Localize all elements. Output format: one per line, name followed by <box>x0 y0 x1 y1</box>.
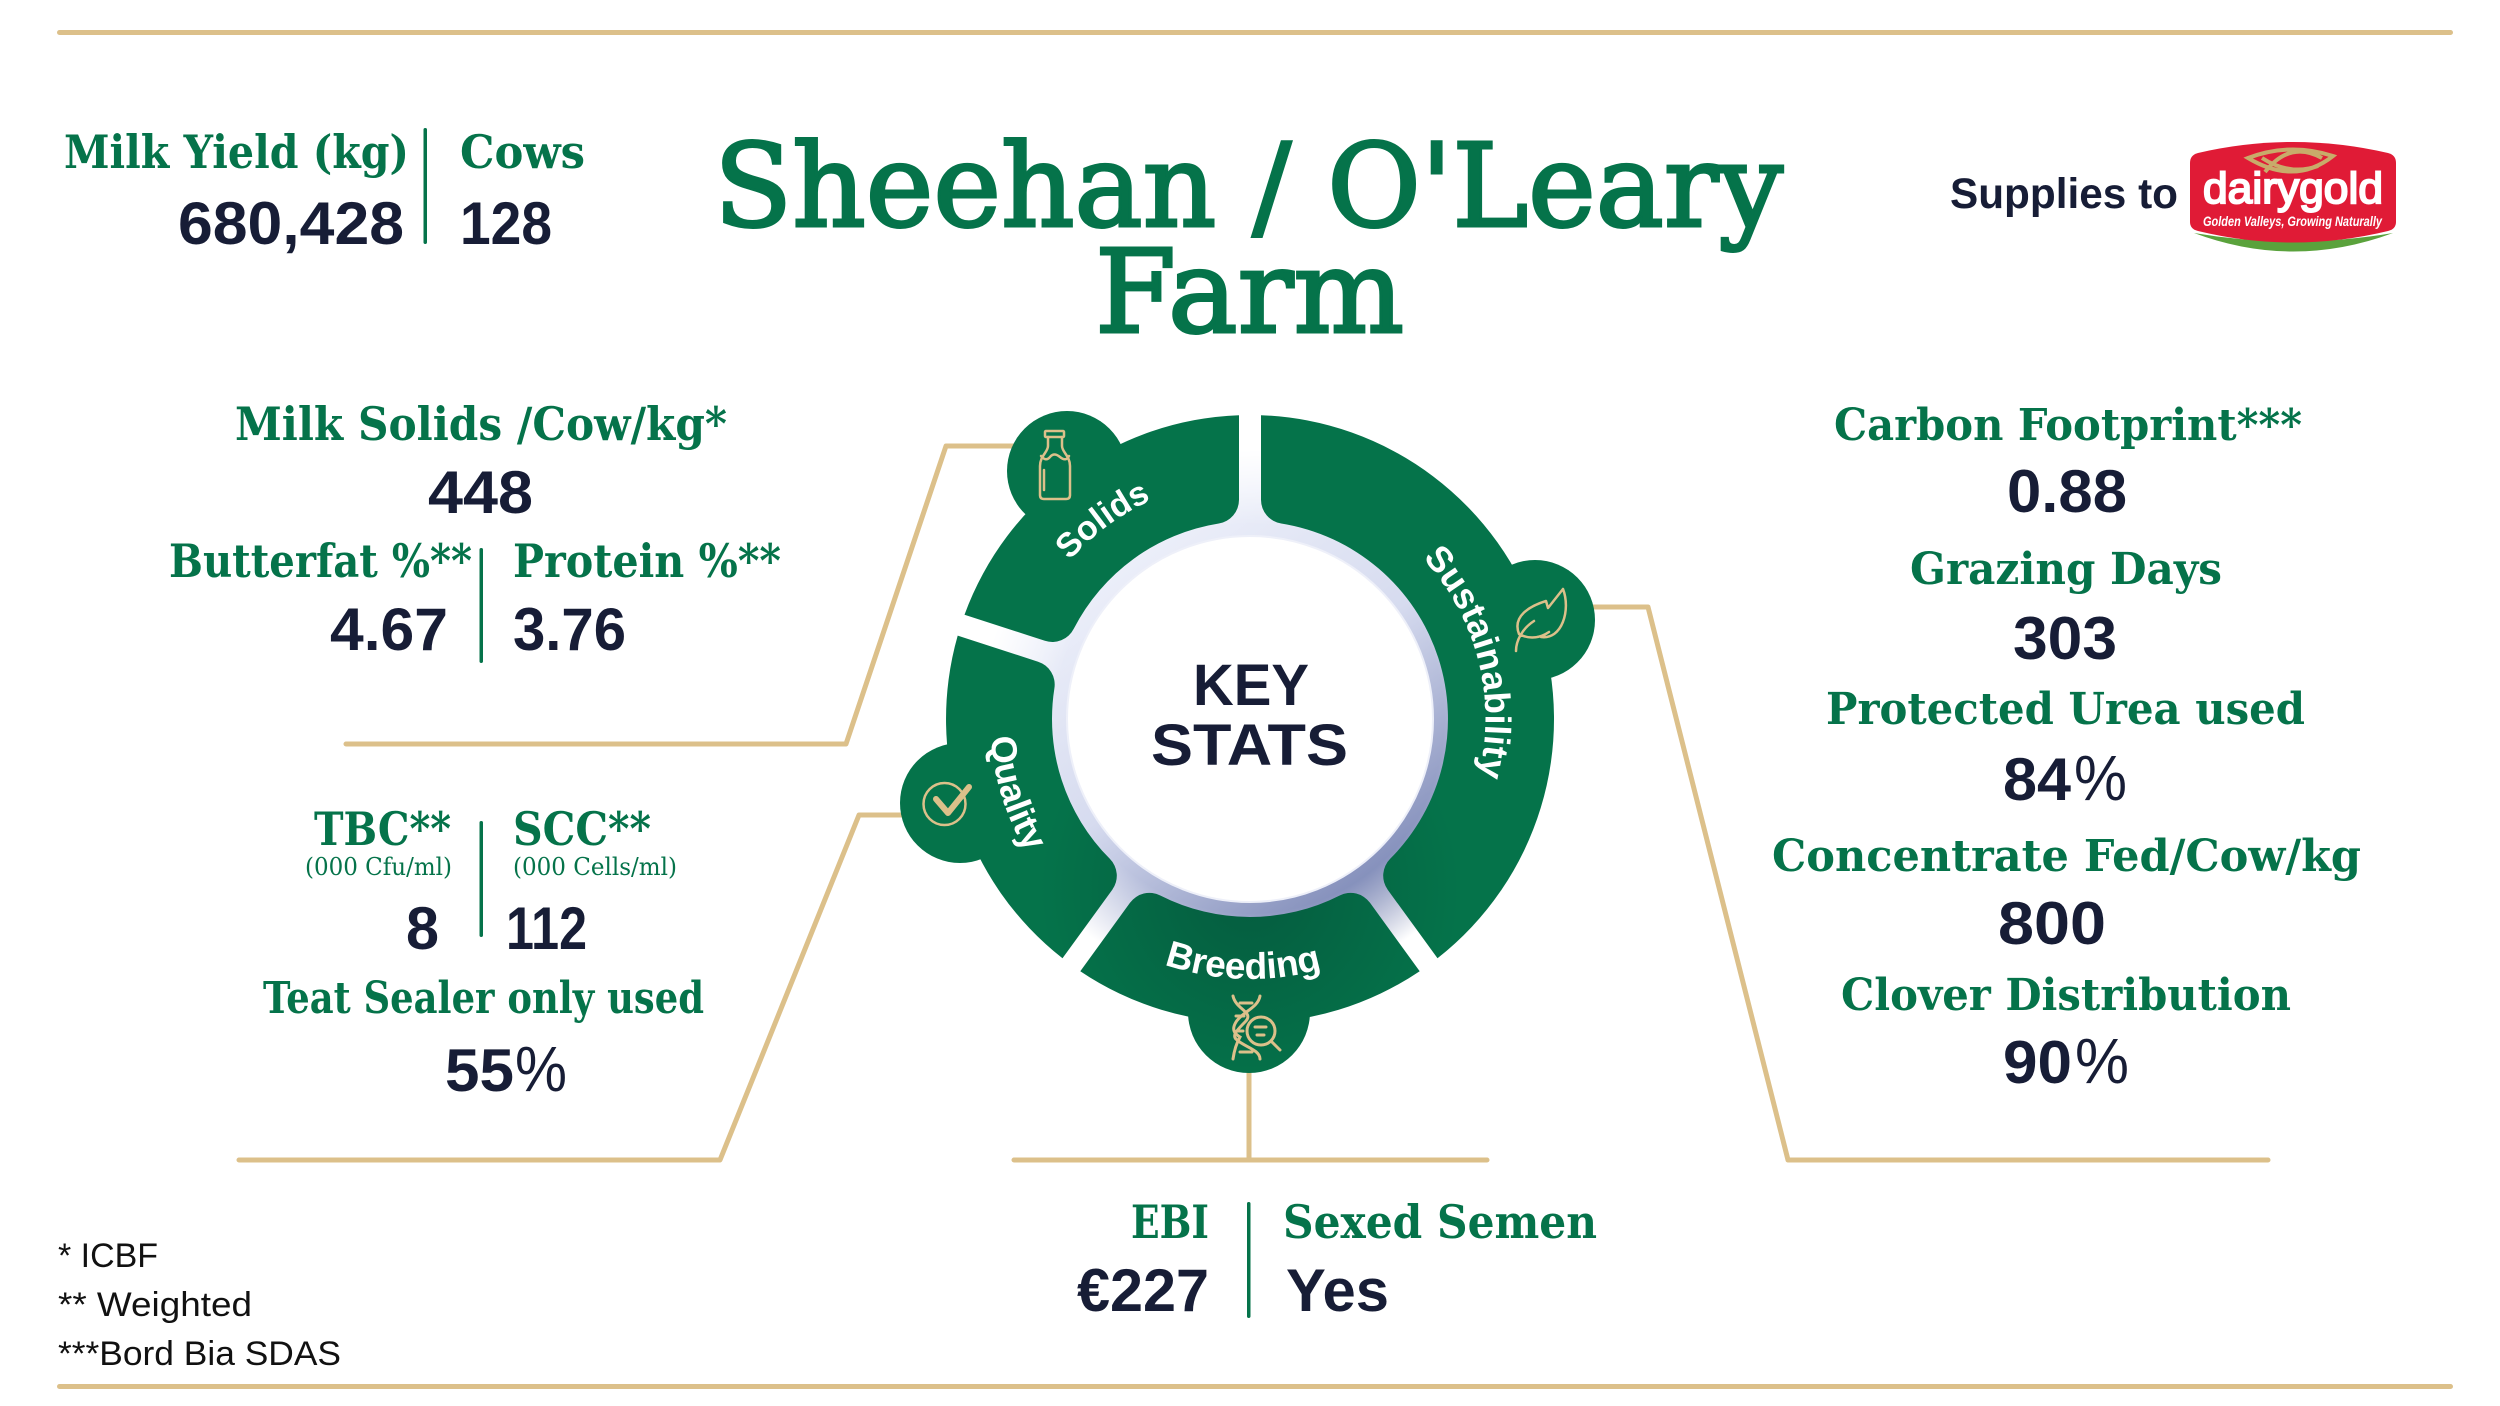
panel: solids stats: Protein %** <box>513 534 781 588</box>
supplies to label: Supplies to <box>1950 170 2178 218</box>
panel: quality stats: 55 <box>445 1037 514 1104</box>
segment: solids <box>964 411 1239 642</box>
center label: key stats <box>1151 653 1348 778</box>
panel: quality stats: (000 Cells/ml) <box>513 853 677 881</box>
icon: leaf <box>1516 589 1566 651</box>
panel: sustainability stats: Clover Distribution <box>1841 970 2291 1021</box>
shaded disc behind ring <box>1020 480 1448 940</box>
segment: sustainability: Sustainability <box>1426 546 1512 780</box>
panel: quality stats: SCC** <box>513 802 651 856</box>
icon: dna with magnifier <box>1233 996 1280 1059</box>
stat: milk yield and cows: 680,428 <box>178 190 404 257</box>
panel: sustainability stats: Concentrate Fed/Cow/kg <box>1772 831 2361 882</box>
panel: solids stats: Milk Solids /Cow/kg* <box>235 397 727 451</box>
center label: key stats: KEY <box>1193 653 1309 718</box>
bottom rule <box>57 1384 2453 1389</box>
logo: dairygold: Golden Valleys, Growing Naturally <box>2203 213 2383 229</box>
panel: quality stats: % <box>515 1033 567 1105</box>
connector: quality <box>239 815 910 1160</box>
icon: milk bottle <box>1040 431 1070 499</box>
panel: sustainability stats: % <box>2074 742 2127 814</box>
panel: sustainability stats: 303 <box>2013 605 2117 672</box>
stat: milk yield and cows: Cows <box>460 125 585 179</box>
panel: breeding stats <box>1077 1195 1597 1324</box>
panel: solids stats <box>169 397 781 663</box>
icon: check mark <box>924 783 969 825</box>
panel: sustainability stats: 0.88 <box>2007 458 2127 525</box>
center circle <box>1067 536 1433 902</box>
title <box>714 120 1783 360</box>
panel: solids stats: 3.76 <box>513 596 626 663</box>
panel: quality stats: (000 Cfu/ml) <box>305 853 452 881</box>
footnotes: ***Bord Bia SDAS <box>58 1335 341 1373</box>
stat: milk yield and cows: 128 <box>460 190 552 257</box>
segment: quality: Quality <box>986 737 1044 847</box>
segment: breeding <box>1080 892 1420 1073</box>
panel: sustainability stats <box>1772 400 2361 1097</box>
footnotes <box>58 1237 341 1373</box>
panel: solids stats: 448 <box>428 459 533 526</box>
panel: sustainability stats: Carbon Footprint*** <box>1834 400 2302 451</box>
panel: sustainability stats: 84 <box>2003 746 2072 813</box>
panel: sustainability stats: 90 <box>2003 1029 2072 1096</box>
panel: quality stats: Teat Sealer only used <box>263 973 704 1024</box>
panel: breeding stats: EBI <box>1131 1195 1209 1249</box>
connector: sustainability <box>1590 607 2268 1160</box>
panel: sustainability stats: Protected Urea used <box>1826 684 2305 735</box>
segment: breeding: Breeding <box>1166 941 1320 980</box>
panel: breeding stats: Yes <box>1286 1257 1389 1324</box>
top rule <box>57 30 2453 35</box>
title: Farm <box>1095 226 1404 360</box>
panel: breeding stats: Sexed Semen <box>1283 1195 1597 1249</box>
stat: milk yield and cows <box>64 125 585 257</box>
footnotes: ** Weighted <box>58 1286 252 1324</box>
segment: sustainability <box>1261 415 1595 958</box>
panel: key stats wheel <box>900 411 1595 1073</box>
logo: dairygold: dairygold <box>2203 164 2383 213</box>
connector: breeding <box>1014 1060 1487 1160</box>
panel: sustainability stats: % <box>2075 1025 2129 1097</box>
title: Sheehan / O'Leary <box>714 120 1783 254</box>
panel: sustainability stats: 800 <box>1998 890 2106 957</box>
panel: solids stats: 4.67 <box>330 596 448 663</box>
connector: solids <box>346 446 1020 744</box>
panel: quality stats: 112 <box>506 895 587 962</box>
panel: sustainability stats: Grazing Days <box>1910 544 2222 595</box>
panel: quality stats: 8 <box>406 895 439 962</box>
panel: solids stats: Butterfat %** <box>169 534 472 588</box>
panel: quality stats: TBC** <box>314 802 451 856</box>
segment: solids: Solids <box>1056 486 1148 557</box>
logo: dairygold <box>2190 142 2396 252</box>
panel: breeding stats: €227 <box>1077 1257 1209 1324</box>
panel: quality stats <box>263 802 704 1105</box>
segment: quality <box>900 636 1117 958</box>
center label: key stats: STATS <box>1151 713 1348 778</box>
stat: milk yield and cows: Milk Yield (kg) <box>64 125 409 179</box>
footnotes: * ICBF <box>58 1237 158 1275</box>
